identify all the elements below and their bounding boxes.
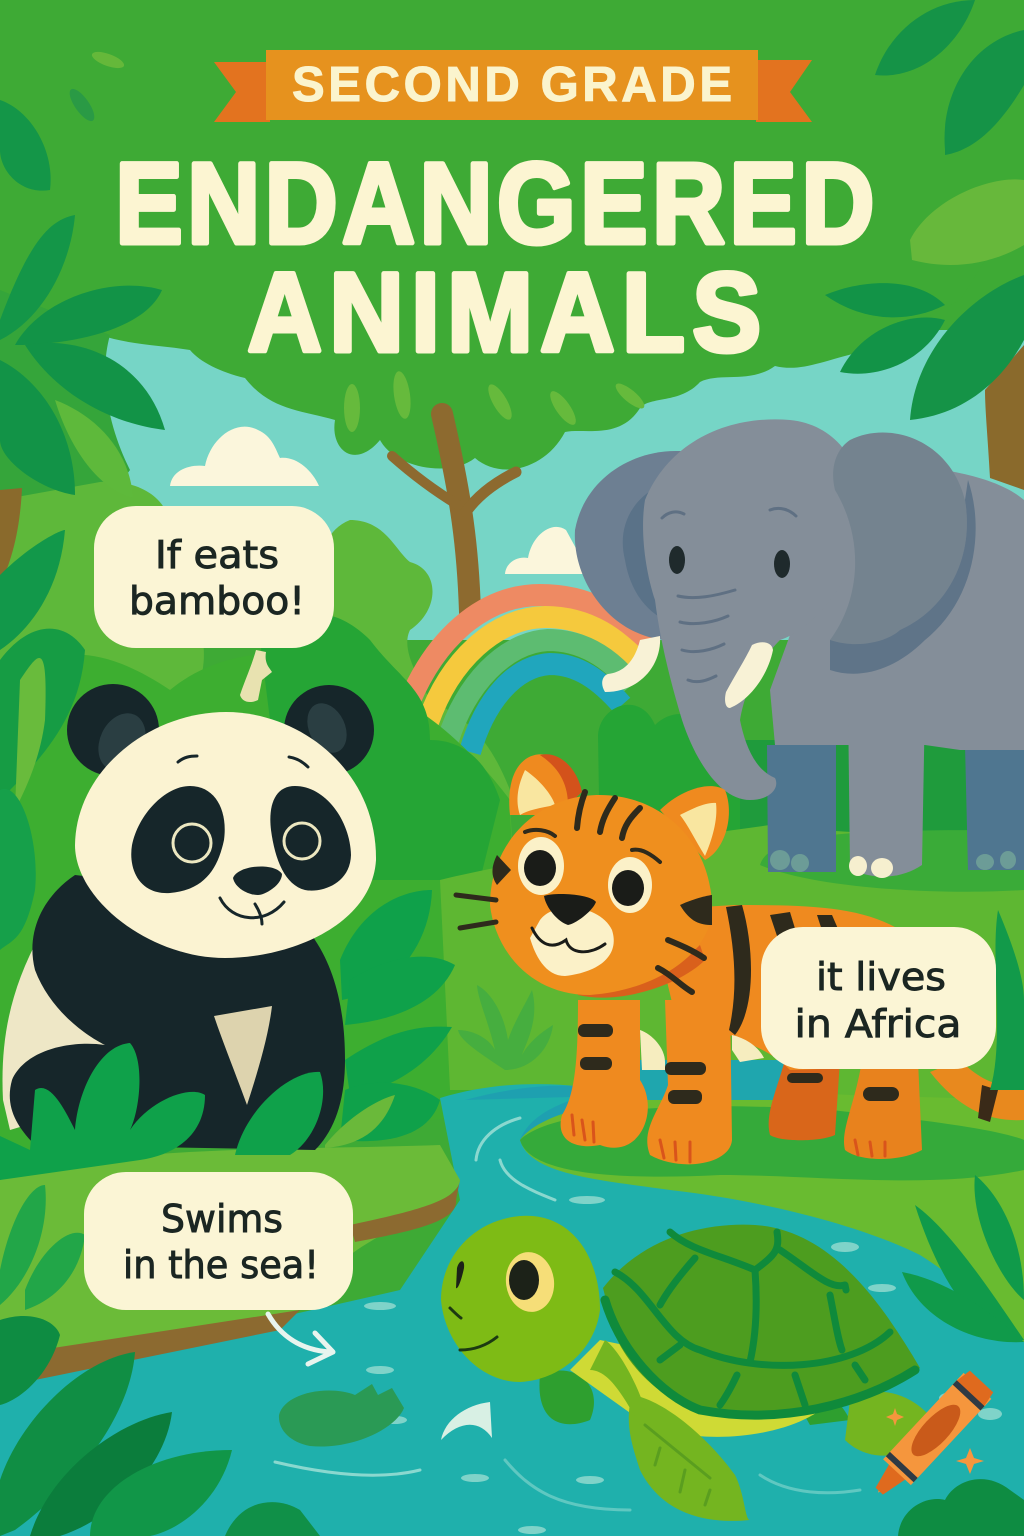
tiger cream belly patches <box>640 1030 665 1070</box>
tiger's grass island <box>520 1092 1024 1342</box>
turtle belly <box>570 1340 840 1437</box>
elephant tusk near <box>725 642 773 708</box>
meadow right <box>440 820 1024 1230</box>
tree canopy <box>0 0 1024 470</box>
panda body <box>10 875 345 1150</box>
elephant tusk far <box>602 636 660 692</box>
speech bubble: turtle: in the sea! <box>123 1243 319 1287</box>
tiger mouth <box>532 928 605 952</box>
tiger eyes <box>524 850 556 886</box>
elephant front leg <box>848 700 925 877</box>
speech bubble: panda: bamboo! <box>129 579 305 623</box>
ribbon band <box>266 50 758 120</box>
tiger collar shading <box>578 945 705 998</box>
crayon icon <box>864 1369 995 1506</box>
elephant body <box>770 466 1024 750</box>
title line 1: ENDANGERED <box>115 139 879 267</box>
left tree stump <box>0 488 22 585</box>
elephant toes <box>770 850 1016 872</box>
panda head <box>75 712 376 958</box>
tiger body <box>650 905 924 1070</box>
elephant brows and trunk lines <box>662 508 796 682</box>
turtle front flipper <box>629 1395 750 1521</box>
bank soil <box>35 1180 460 1380</box>
back bushes <box>0 482 520 1160</box>
panda white back <box>2 935 120 1130</box>
panda <box>2 684 376 1150</box>
cloud: left <box>170 427 319 486</box>
speech bubble: tiger: in Africa <box>794 1002 962 1046</box>
speech bubble: panda <box>94 506 334 648</box>
tiger head <box>490 795 712 995</box>
crayon sparkles <box>956 1448 984 1474</box>
panda's bamboo shoot <box>240 650 272 702</box>
turtle shell <box>603 1225 920 1416</box>
canopy leaves <box>344 370 648 432</box>
panda mouth and brows <box>178 756 308 924</box>
panda front leaves <box>0 1043 395 1180</box>
speech bubble: panda: If eats <box>155 533 279 577</box>
river ripples <box>275 1118 860 1510</box>
elephant far legs <box>767 745 836 872</box>
tiger eye patches <box>518 837 564 895</box>
tiger <box>456 754 1024 1164</box>
tiger ears <box>509 754 574 815</box>
speech bubble: turtle <box>84 1172 353 1310</box>
speech bubble: tiger <box>761 927 996 1069</box>
tiger stripes <box>456 792 704 992</box>
right tree trunk <box>985 345 1024 490</box>
main title <box>115 139 879 375</box>
panda eyes <box>173 824 211 862</box>
turtle <box>441 1216 937 1521</box>
tiger muzzle <box>530 908 614 976</box>
speech bubble: tiger: it lives <box>816 955 946 999</box>
water flecks <box>364 1196 1002 1534</box>
tiger far legs <box>769 1060 840 1140</box>
bottom left foliage <box>0 1185 320 1536</box>
ribbon tails <box>214 62 270 122</box>
panda nose <box>233 866 282 895</box>
elephant white toes <box>849 856 893 878</box>
rainbow <box>410 595 650 752</box>
bottom right bush <box>898 1479 1024 1536</box>
river <box>0 1084 1024 1536</box>
right shrub beside tiger <box>990 910 1024 1090</box>
elephant left ear <box>575 451 690 640</box>
speech bubble: turtle: Swims <box>161 1197 283 1241</box>
panda eye patches <box>131 786 225 893</box>
turtle flipper veins <box>645 1425 710 1505</box>
right lower shrub <box>902 1175 1024 1342</box>
ribbon label: SECOND GRADE <box>292 58 732 112</box>
title ribbon <box>214 50 812 122</box>
bushes in front of rainbow <box>260 614 500 880</box>
water between tiger's legs <box>640 1060 800 1100</box>
title line 2: ANIMALS <box>248 250 768 375</box>
middle green backdrop <box>0 654 520 1170</box>
small grass tuft <box>458 985 553 1070</box>
turtle nostril and smile <box>450 1308 497 1350</box>
sky <box>60 330 1024 640</box>
panda chest patch <box>214 1006 272 1105</box>
turtle eye <box>502 1249 558 1315</box>
turtle back flipper <box>539 1371 594 1424</box>
tiger tail <box>930 1060 1024 1120</box>
elephant right ear <box>830 432 967 652</box>
elephant eyes <box>669 546 790 578</box>
tiger cheek and body stripes <box>492 855 899 1104</box>
left foliage <box>0 100 165 950</box>
tree trunk <box>392 414 516 612</box>
elephant head and trunk <box>643 419 862 800</box>
turtle shell plates <box>605 1232 915 1415</box>
lily pad <box>279 1384 404 1447</box>
small drifting leaves <box>65 49 126 125</box>
left green backdrop <box>0 290 130 530</box>
panda ears <box>67 684 159 776</box>
water splash <box>441 1402 492 1440</box>
right top foliage <box>825 0 1024 420</box>
arrow: bubble to water <box>268 1314 333 1364</box>
tiger claws <box>572 1115 885 1162</box>
elephant <box>575 419 1024 878</box>
turtle far eye <box>456 1261 464 1288</box>
right panda bush <box>340 890 455 1141</box>
left river bank <box>0 1145 460 1390</box>
tiger legs <box>561 1000 648 1148</box>
cloud: centre <box>505 527 590 574</box>
tiger nose <box>544 894 596 925</box>
turtle head <box>441 1216 600 1382</box>
